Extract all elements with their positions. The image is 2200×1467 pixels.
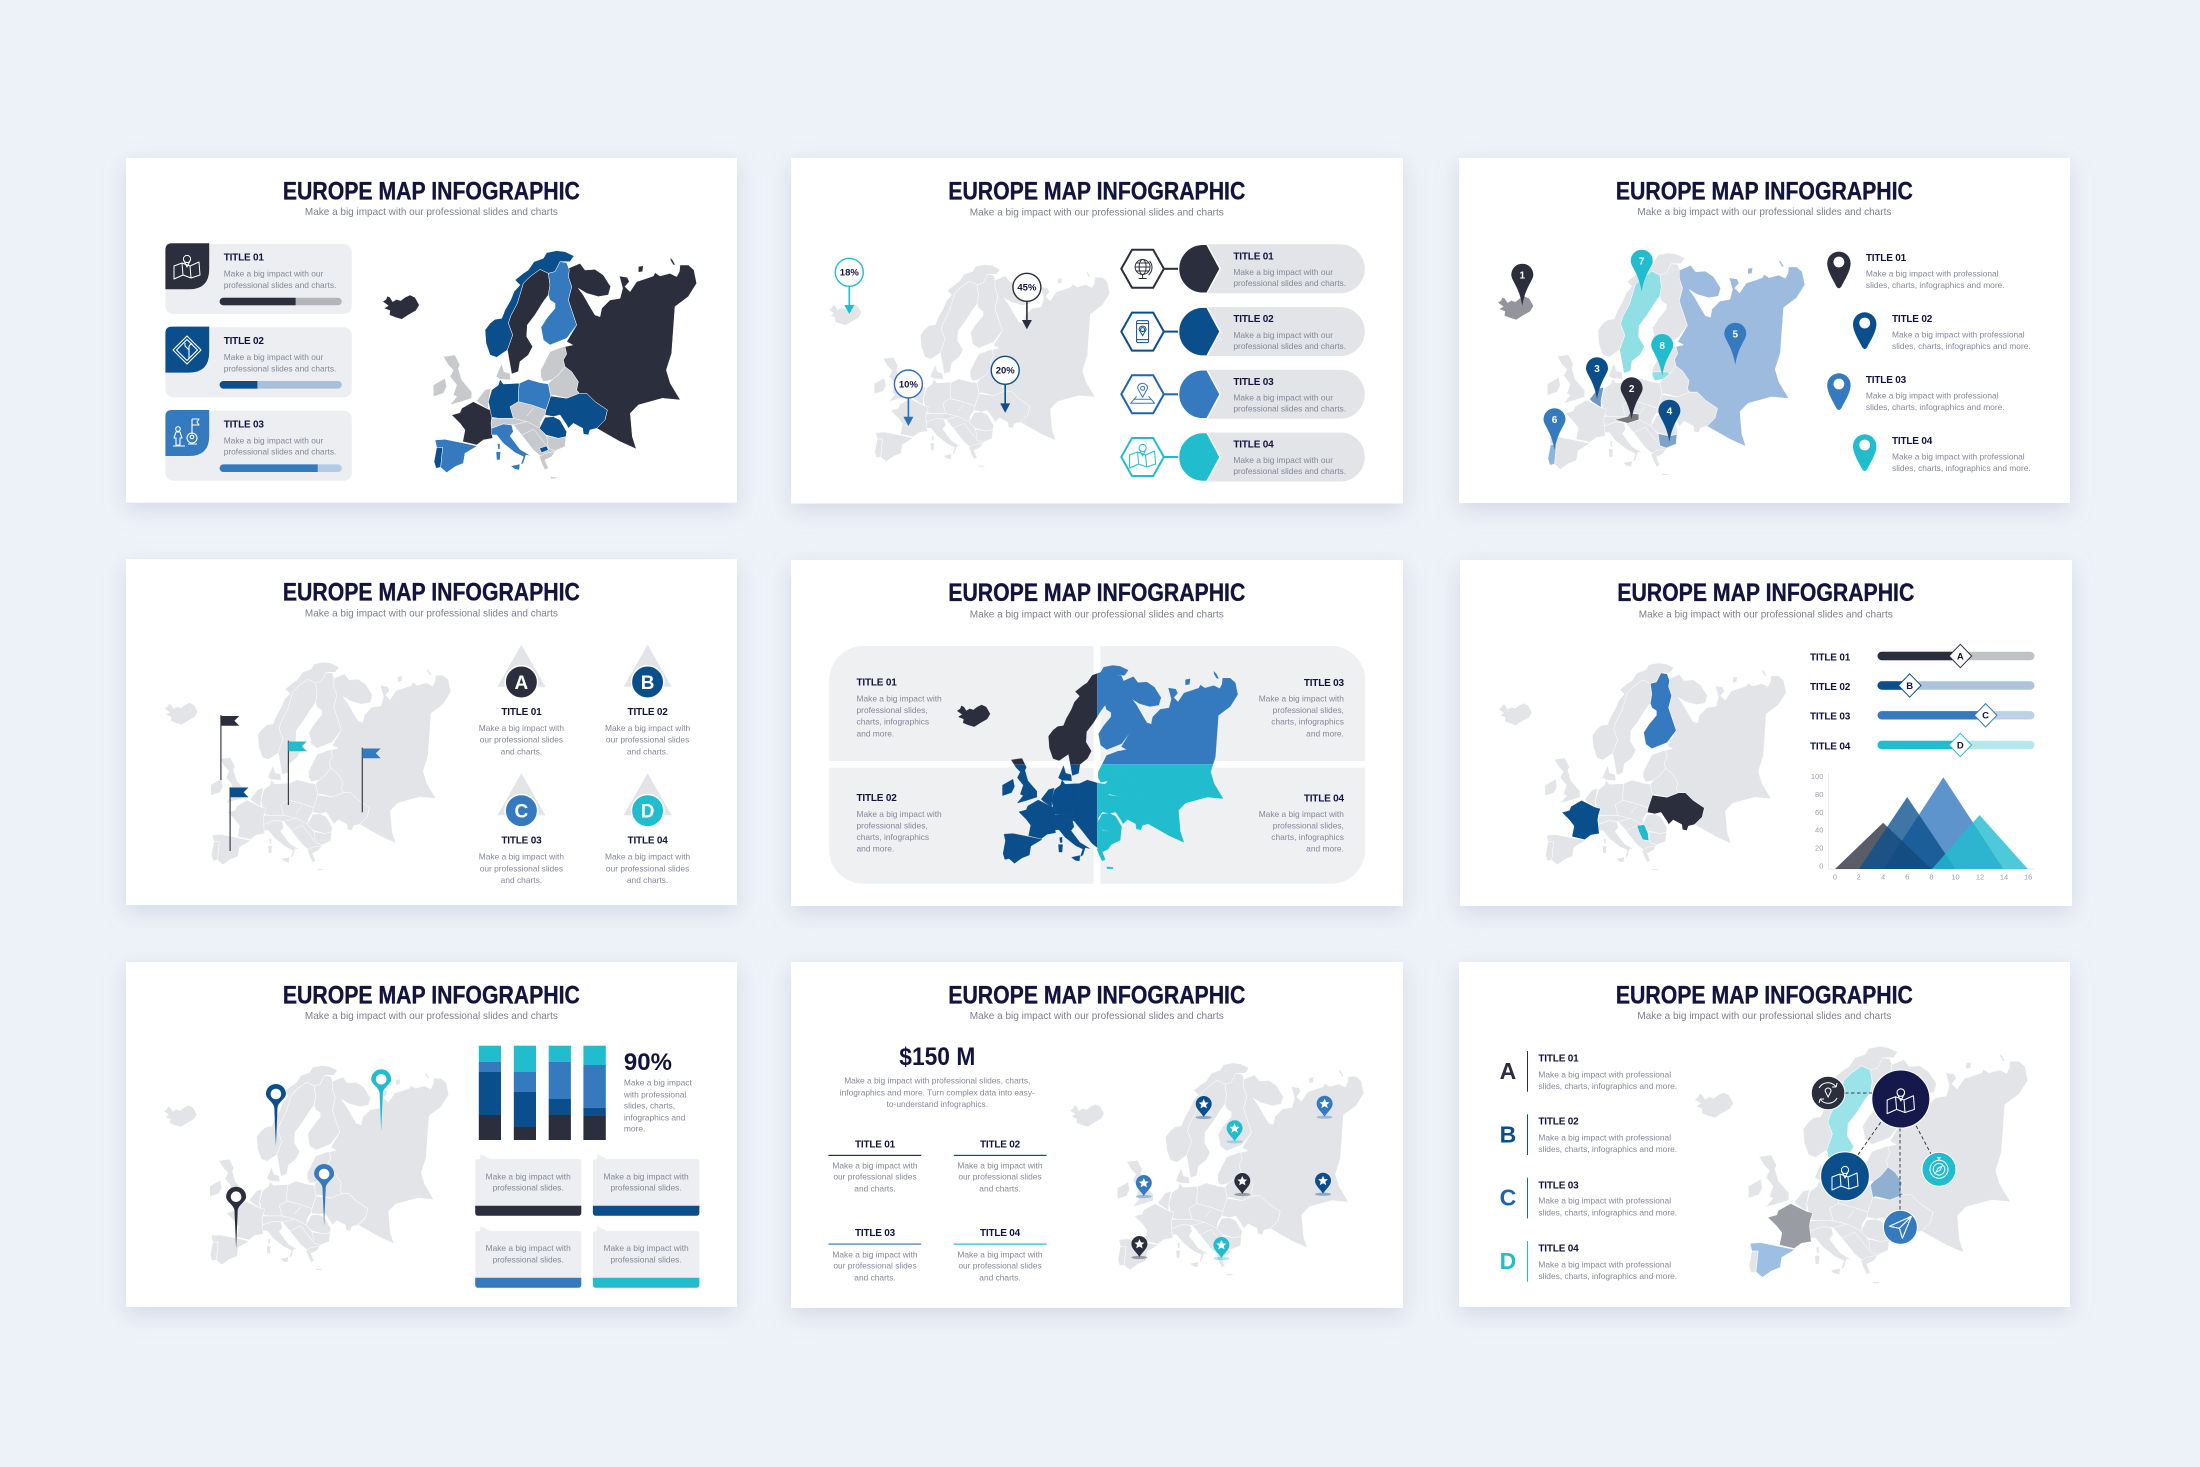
stat: $150 M: $150 M — [899, 1043, 975, 1071]
map: highlighted regions — [1498, 253, 1805, 475]
pin 6 — [1544, 408, 1566, 450]
text: title 02: professional slides, — [856, 820, 928, 830]
column: title 02: and charts. — [979, 1183, 1021, 1193]
stat: 90%: slides, charts, — [624, 1101, 675, 1111]
item C: C — [1500, 1185, 1516, 1211]
flag: navy — [230, 787, 248, 851]
card: title 03: Make a big impact with our — [224, 435, 324, 445]
node: compass — [1922, 1152, 1956, 1186]
node: cycle — [1811, 1076, 1845, 1110]
card: title 02: Make a big impact with our — [224, 352, 324, 362]
card: title 03 — [165, 410, 352, 481]
item D: Make a big impact with — [605, 852, 691, 862]
pin 6: 6 — [1552, 415, 1558, 426]
slider: title 03 — [1810, 704, 2034, 727]
card: blue: Make a big impact with — [486, 1243, 571, 1253]
column: title 03: our professional slides — [833, 1261, 917, 1271]
stacked bars — [479, 1046, 606, 1140]
legend: title 04: Make a big impact with professional — [1892, 452, 2025, 462]
pin: navy — [266, 1084, 286, 1146]
marker: 45%: 45% — [1017, 283, 1037, 294]
legend: title 01: TITLE 01 — [1866, 253, 1907, 264]
chart: overlapping triangles: 100 — [1811, 772, 1823, 781]
item A: A — [515, 673, 529, 694]
text: title 03: and more. — [1306, 728, 1344, 738]
slider: title 02 — [1810, 674, 2034, 697]
title: EUROPE MAP INFOGRAPHIC — [1616, 177, 1913, 205]
column: title 02: our professional slides — [958, 1172, 1042, 1182]
marker: 45% — [1013, 273, 1041, 329]
column: title 04: Make a big impact with — [957, 1249, 1043, 1259]
stat: $150 M: infographics and more. Turn complex data into easy- — [840, 1087, 1035, 1097]
chart: overlapping triangles: 8 — [1929, 872, 1933, 882]
item C: Make a big impact with professional — [1538, 1196, 1671, 1206]
text: title 01 — [856, 678, 942, 738]
item A — [479, 645, 564, 756]
row: title 04: TITLE 04 — [1233, 440, 1274, 450]
item A: Make a big impact with professional — [1538, 1069, 1671, 1079]
map: highlighted countries — [1499, 663, 1786, 870]
text: title 04: professional slides, — [1273, 820, 1344, 830]
item B: B — [641, 673, 654, 694]
card: blue — [475, 1226, 581, 1288]
subtitle: Make a big impact with our professional slides and charts — [305, 1010, 558, 1022]
pin 2: 2 — [1629, 384, 1635, 395]
map: grey — [1070, 1063, 1364, 1275]
item C: our professional slides — [480, 863, 563, 873]
map: grey — [165, 662, 451, 870]
item D: D — [1500, 1248, 1516, 1274]
flag: blue — [362, 748, 381, 812]
card: title 02: TITLE 02 — [224, 336, 264, 347]
column: title 01: TITLE 01 — [855, 1139, 896, 1150]
subtitle: Make a big impact with our professional slides and charts — [970, 1010, 1224, 1022]
pin 8 — [1651, 334, 1673, 376]
card: cyan — [593, 1226, 699, 1288]
quadrant: bottom right — [1100, 768, 1365, 884]
subtitle: Make a big impact with our professional slides and charts — [1637, 1010, 1891, 1022]
item A — [1500, 1051, 1677, 1092]
marker: 18% — [835, 258, 863, 314]
map: four colours — [957, 665, 1238, 869]
column: title 03: and charts. — [854, 1272, 896, 1282]
item C — [479, 773, 564, 885]
item A: our professional slides — [480, 735, 563, 745]
marker: 20% — [991, 356, 1019, 413]
legend: title 04: TITLE 04 — [1892, 436, 1933, 447]
pin: cyan — [371, 1069, 391, 1131]
quadrant: top right — [1100, 646, 1365, 761]
pin 4 — [1658, 400, 1680, 442]
column: title 02 — [954, 1139, 1047, 1193]
item B: Make a big impact with — [605, 723, 691, 733]
row: title 03 — [1121, 370, 1365, 419]
stat: $150 M — [840, 1043, 1035, 1109]
card: title 03: TITLE 03 — [224, 419, 264, 430]
row: title 02 — [1121, 307, 1365, 356]
chart: overlapping triangles: 60 — [1815, 808, 1823, 817]
text: title 01: TITLE 01 — [856, 678, 897, 689]
map: coloured countries — [383, 251, 697, 479]
card: navy: Make a big impact with — [604, 1171, 689, 1181]
slider: title 02: TITLE 02 — [1810, 682, 1851, 693]
card: title 01: TITLE 01 — [224, 253, 264, 264]
row: title 02: professional slides and charts. — [1233, 341, 1346, 351]
column: title 04: TITLE 04 — [980, 1228, 1021, 1239]
text: title 02: and more. — [856, 844, 894, 854]
slider: title 02: B — [1906, 681, 1913, 692]
text: title 04: Make a big impact with — [1259, 809, 1344, 819]
legend: title 02: slides, charts, infographics and more. — [1892, 341, 2031, 351]
slider: title 03: C — [1982, 711, 1989, 722]
column: title 03: Make a big impact with — [832, 1249, 918, 1259]
row: title 01: professional slides and charts. — [1233, 278, 1346, 288]
title: EUROPE MAP INFOGRAPHIC — [283, 981, 580, 1009]
item B: B — [1500, 1121, 1516, 1147]
title: EUROPE MAP INFOGRAPHIC — [283, 578, 580, 606]
column: title 04: our professional slides — [958, 1261, 1042, 1271]
subtitle: Make a big impact with our professional slides and charts — [1639, 608, 1893, 620]
chart: overlapping triangles: 4 — [1881, 872, 1885, 882]
row: title 02: Make a big impact with our — [1233, 330, 1333, 340]
chart: overlapping triangles: 16 — [2024, 872, 2032, 882]
node: main map — [1872, 1070, 1930, 1128]
pin 5 — [1724, 323, 1746, 365]
stat: 90%: Make a big impact — [624, 1078, 693, 1088]
item B: Make a big impact with professional — [1538, 1132, 1671, 1142]
pin 3: 3 — [1594, 364, 1600, 375]
text: title 02: charts, infographics — [856, 832, 929, 842]
legend: title 04 — [1853, 434, 2031, 473]
chart: overlapping triangles: 6 — [1905, 872, 1909, 882]
card: cyan: Make a big impact with — [604, 1243, 689, 1253]
subtitle: Make a big impact with our professional slides and charts — [305, 206, 558, 218]
marker: 18%: 18% — [840, 268, 859, 279]
title: EUROPE MAP INFOGRAPHIC — [948, 579, 1245, 607]
quadrant: bottom left — [829, 768, 1094, 884]
stat: 90% — [623, 1049, 693, 1134]
text: title 03: professional slides, — [1273, 705, 1344, 715]
card: navy: professional slides. — [610, 1183, 682, 1193]
card: dark — [475, 1154, 581, 1216]
row: title 03: TITLE 03 — [1233, 377, 1274, 388]
legend: title 04: slides, charts, infographics and more. — [1892, 463, 2031, 473]
node: send — [1883, 1210, 1917, 1244]
subtitle: Make a big impact with our professional slides and charts — [970, 206, 1224, 218]
panel: slide 3, numbered pins — [1459, 158, 2070, 503]
item C: and charts. — [501, 875, 542, 885]
stat: 90%: more. — [624, 1124, 645, 1134]
slider: title 04: TITLE 04 — [1810, 741, 1851, 752]
column: title 04: and charts. — [979, 1272, 1021, 1282]
pin: dark — [226, 1187, 246, 1249]
flag: dark — [221, 715, 239, 780]
chart: overlapping triangles: 0 — [1819, 862, 1823, 871]
text: title 04 — [1259, 793, 1345, 854]
item A: A — [1500, 1058, 1516, 1084]
column: title 02: Make a big impact with — [957, 1160, 1043, 1170]
stat: 90%: infographics and — [624, 1112, 686, 1122]
item D — [1500, 1241, 1677, 1282]
text: title 04: TITLE 04 — [1304, 793, 1345, 804]
panel: slide 4, flags and lettered items — [126, 559, 737, 905]
chart: overlapping triangles: 40 — [1815, 826, 1823, 835]
pin: blue — [314, 1164, 334, 1226]
stat: $150 M: to-understand infographics. — [887, 1099, 988, 1109]
network connectors — [1845, 1093, 1931, 1210]
item A: TITLE 01 — [501, 707, 542, 718]
pin 2 — [1621, 377, 1643, 419]
chart: overlapping triangles: 20 — [1815, 844, 1823, 853]
legend: title 03: slides, charts, infographics and more. — [1866, 402, 2005, 412]
text: title 02 — [856, 793, 942, 854]
item C — [1500, 1178, 1677, 1218]
stat: $150 M: Make a big impact with professional slides, charts, — [844, 1076, 1030, 1086]
item A: Make a big impact with — [479, 723, 564, 733]
slider: title 01: A — [1957, 651, 1964, 662]
text: title 03: TITLE 03 — [1304, 678, 1345, 689]
chart: overlapping triangles: 12 — [1976, 872, 1984, 882]
title: EUROPE MAP INFOGRAPHIC — [1616, 981, 1913, 1009]
row: title 02: TITLE 02 — [1233, 314, 1274, 325]
card: navy — [593, 1154, 699, 1216]
row: title 04: Make a big impact with our — [1233, 455, 1333, 465]
panel: slide 5, four quadrants — [791, 560, 1403, 906]
text: title 01: charts, infographics — [856, 717, 929, 727]
item B: slides, charts, infographics and more. — [1538, 1144, 1677, 1154]
slider: title 01: TITLE 01 — [1810, 652, 1851, 663]
subtitle: Make a big impact with our professional slides and charts — [1637, 206, 1891, 218]
chart: overlapping triangles: 2 — [1857, 872, 1861, 882]
legend: title 02 — [1853, 312, 2031, 351]
text: title 01: Make a big impact with — [856, 694, 942, 704]
slider: title 03: TITLE 03 — [1810, 712, 1851, 723]
title: EUROPE MAP INFOGRAPHIC — [283, 177, 580, 205]
item B — [1500, 1114, 1677, 1155]
legend: title 02: TITLE 02 — [1892, 314, 1933, 325]
panel: slide 1, map with cards — [126, 158, 737, 503]
item D: and charts. — [627, 875, 668, 885]
item B: and charts. — [627, 746, 668, 756]
item C: Make a big impact with — [479, 852, 564, 862]
card: dark: Make a big impact with — [486, 1171, 571, 1181]
row: title 01: Make a big impact with our — [1233, 267, 1333, 277]
slider: title 04 — [1810, 733, 2034, 757]
card: title 02: professional slides and charts. — [224, 363, 336, 373]
row: title 01: TITLE 01 — [1233, 251, 1274, 262]
chart: overlapping triangles — [1811, 772, 2035, 882]
text: title 01: and more. — [856, 728, 894, 738]
item D: slides, charts, infographics and more. — [1538, 1271, 1677, 1281]
pin 8: 8 — [1659, 341, 1665, 352]
card: title 02 — [165, 327, 352, 397]
title: EUROPE MAP INFOGRAPHIC — [1617, 579, 1914, 607]
item D: TITLE 04 — [1538, 1244, 1579, 1255]
item C: slides, charts, infographics and more. — [1538, 1207, 1677, 1217]
column: title 01 — [828, 1139, 921, 1193]
pin 7: 7 — [1639, 256, 1645, 268]
panel: slide 6, sliders and area chart — [1460, 560, 2072, 906]
quadrant: top left — [829, 646, 1094, 761]
item C: TITLE 03 — [501, 836, 542, 847]
column: title 01: our professional slides — [833, 1172, 917, 1182]
row: title 01 — [1121, 244, 1365, 293]
panel: slide 9, letters and network — [1459, 962, 2070, 1307]
item D: Make a big impact with professional — [1538, 1259, 1671, 1269]
chart: overlapping triangles: 10 — [1951, 872, 1960, 882]
text: title 01: professional slides, — [856, 705, 928, 715]
legend: title 03 — [1827, 373, 2005, 412]
item D: TITLE 04 — [628, 836, 668, 847]
text: title 03 — [1259, 678, 1345, 738]
pin 3 — [1586, 357, 1608, 399]
column: title 02: TITLE 02 — [980, 1139, 1021, 1150]
pin 7 — [1631, 250, 1653, 292]
row: title 04: professional slides and charts. — [1233, 466, 1346, 476]
chart: overlapping triangles: 14 — [2000, 872, 2008, 882]
card: title 01: professional slides and charts. — [224, 280, 336, 290]
item D: D — [641, 802, 654, 823]
text: title 04: and more. — [1306, 844, 1344, 854]
column: title 04 — [954, 1228, 1047, 1282]
column: title 01: Make a big impact with — [832, 1160, 918, 1170]
legend: title 01 — [1827, 252, 2005, 290]
item A: and charts. — [501, 746, 542, 756]
title: EUROPE MAP INFOGRAPHIC — [948, 178, 1245, 206]
map: grey — [164, 1065, 449, 1270]
map: grey — [829, 264, 1110, 467]
legend: title 02: Make a big impact with professional — [1892, 330, 2025, 340]
item C: TITLE 03 — [1538, 1180, 1579, 1191]
star pins — [1131, 1096, 1333, 1260]
marker: 10% — [894, 370, 922, 426]
legend: title 01: Make a big impact with professional — [1866, 269, 1999, 279]
text: title 04: charts, infographics — [1271, 832, 1344, 842]
panel: slide 2, percent arrows with hexagons — [791, 158, 1403, 504]
pin 4: 4 — [1667, 406, 1673, 418]
legend: title 01: slides, charts, infographics and more. — [1866, 280, 2005, 290]
column: title 03: TITLE 03 — [855, 1228, 896, 1239]
map: highlighted countries — [1695, 1046, 2028, 1284]
item B: TITLE 02 — [1538, 1117, 1579, 1128]
slider: title 01 — [1810, 644, 2034, 668]
item B: TITLE 02 — [628, 707, 668, 718]
subtitle: Make a big impact with our professional slides and charts — [970, 608, 1224, 620]
row: title 03: professional slides and charts. — [1233, 404, 1346, 414]
pin 5: 5 — [1733, 330, 1739, 340]
panel: slide 8, stat and star pins — [791, 962, 1403, 1308]
item D — [605, 773, 691, 885]
panel: slide 7, needle pins and stacked bars — [126, 962, 737, 1307]
slider: title 04: D — [1957, 740, 1964, 751]
card: dark: professional slides. — [493, 1183, 564, 1193]
legend: title 03: Make a big impact with professional — [1866, 391, 1999, 401]
pin 1: 1 — [1520, 270, 1526, 282]
card: title 01: Make a big impact with our — [224, 269, 324, 279]
item B: our professional slides — [606, 735, 689, 745]
card: cyan: professional slides. — [610, 1254, 682, 1264]
text: title 03: charts, infographics — [1271, 717, 1344, 727]
text: title 03: Make a big impact with — [1259, 694, 1344, 704]
row: title 03: Make a big impact with our — [1233, 392, 1333, 402]
pin 1 — [1511, 264, 1533, 306]
column: title 01: and charts. — [854, 1183, 896, 1193]
text: title 02: Make a big impact with — [856, 809, 942, 819]
stat: 90%: 90% — [624, 1049, 672, 1076]
card: blue: professional slides. — [493, 1254, 564, 1264]
item B — [605, 645, 691, 756]
item A: slides, charts, infographics and more. — [1538, 1081, 1677, 1091]
stat: 90%: with professional — [623, 1089, 686, 1099]
card: title 01 — [165, 243, 352, 314]
row: title 04 — [1121, 432, 1365, 482]
subtitle: Make a big impact with our professional slides and charts — [305, 607, 558, 619]
item D: our professional slides — [606, 863, 689, 873]
item A: TITLE 01 — [1538, 1054, 1579, 1065]
item C: C — [515, 802, 529, 823]
title: EUROPE MAP INFOGRAPHIC — [948, 981, 1245, 1009]
column: title 03 — [828, 1228, 921, 1282]
card: title 03: professional slides and charts. — [224, 447, 336, 457]
node: map pin — [1821, 1152, 1869, 1201]
chart: overlapping triangles: 80 — [1815, 790, 1823, 799]
marker: 10%: 10% — [899, 379, 918, 390]
marker: 20%: 20% — [996, 366, 1015, 377]
flag: cyan — [288, 741, 307, 805]
chart: overlapping triangles: 0 — [1833, 872, 1837, 882]
text: title 02: TITLE 02 — [856, 793, 897, 804]
legend: title 03: TITLE 03 — [1866, 375, 1907, 386]
